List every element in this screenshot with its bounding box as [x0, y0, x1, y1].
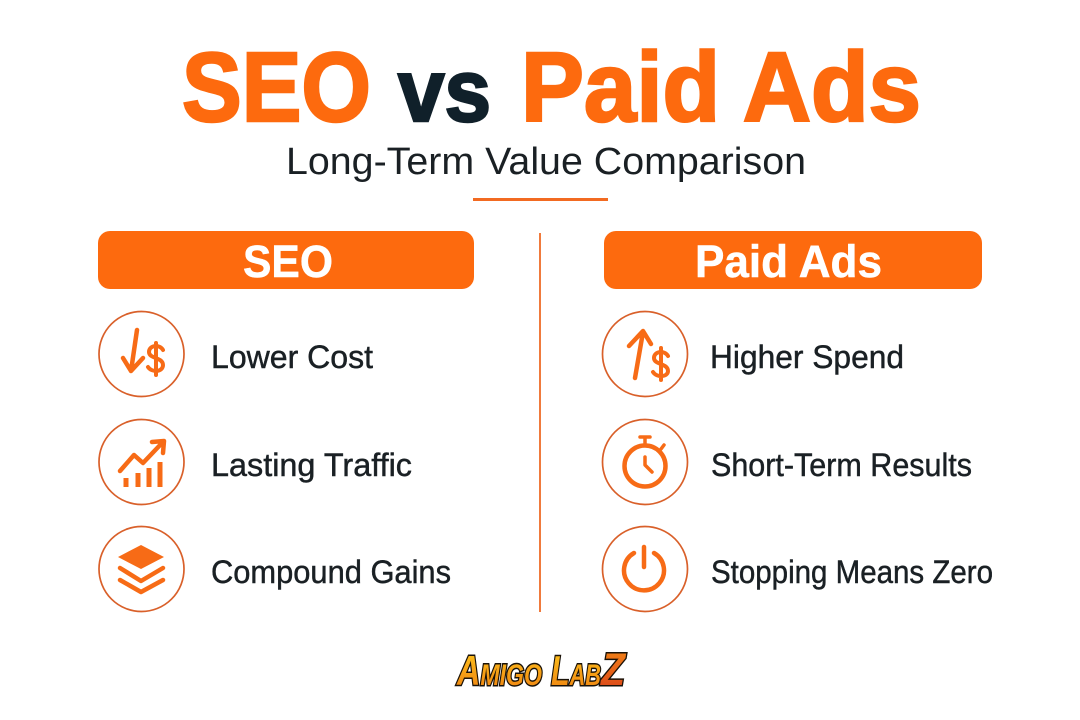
panel: Paid Ads column: [602, 231, 993, 612]
item: compound gains: Compound Gains: [211, 554, 451, 590]
item: higher spend: Higher Spend: [710, 339, 904, 375]
center divider: [539, 233, 541, 612]
logo: Amigo Labz: [456, 644, 626, 695]
item: stopping means zero: [602, 526, 993, 612]
logo: Amigo Labz: LAB: [551, 647, 601, 694]
logo: Amigo Labz: Z: [599, 644, 626, 695]
item: lasting traffic: Lasting Traffic: [211, 447, 412, 483]
item: compound gains: [99, 526, 451, 612]
title: [182, 32, 921, 142]
Paid Ads header: Paid Ads: [695, 236, 882, 287]
Paid Ads header: [604, 231, 982, 289]
SEO header: SEO: [243, 236, 333, 287]
panel: SEO column: [98, 231, 474, 612]
item: lasting traffic: [99, 420, 412, 504]
SEO header: [98, 231, 474, 289]
title: SEO: [182, 32, 371, 142]
title: Paid Ads: [521, 32, 921, 142]
logo: Amigo Labz: AMIGO: [456, 647, 542, 694]
title underline: [473, 198, 608, 201]
item: lower cost: [99, 312, 373, 396]
item: short-term results: Short-Term Results: [711, 447, 972, 483]
item: higher spend: [602, 312, 904, 396]
item: short-term results: [602, 420, 972, 504]
item: lower cost: Lower Cost: [211, 339, 373, 375]
subtitle: Long-Term Value Comparison: [286, 141, 806, 183]
item: stopping means zero: Stopping Means Zero: [711, 554, 993, 590]
title: vs: [398, 41, 491, 140]
